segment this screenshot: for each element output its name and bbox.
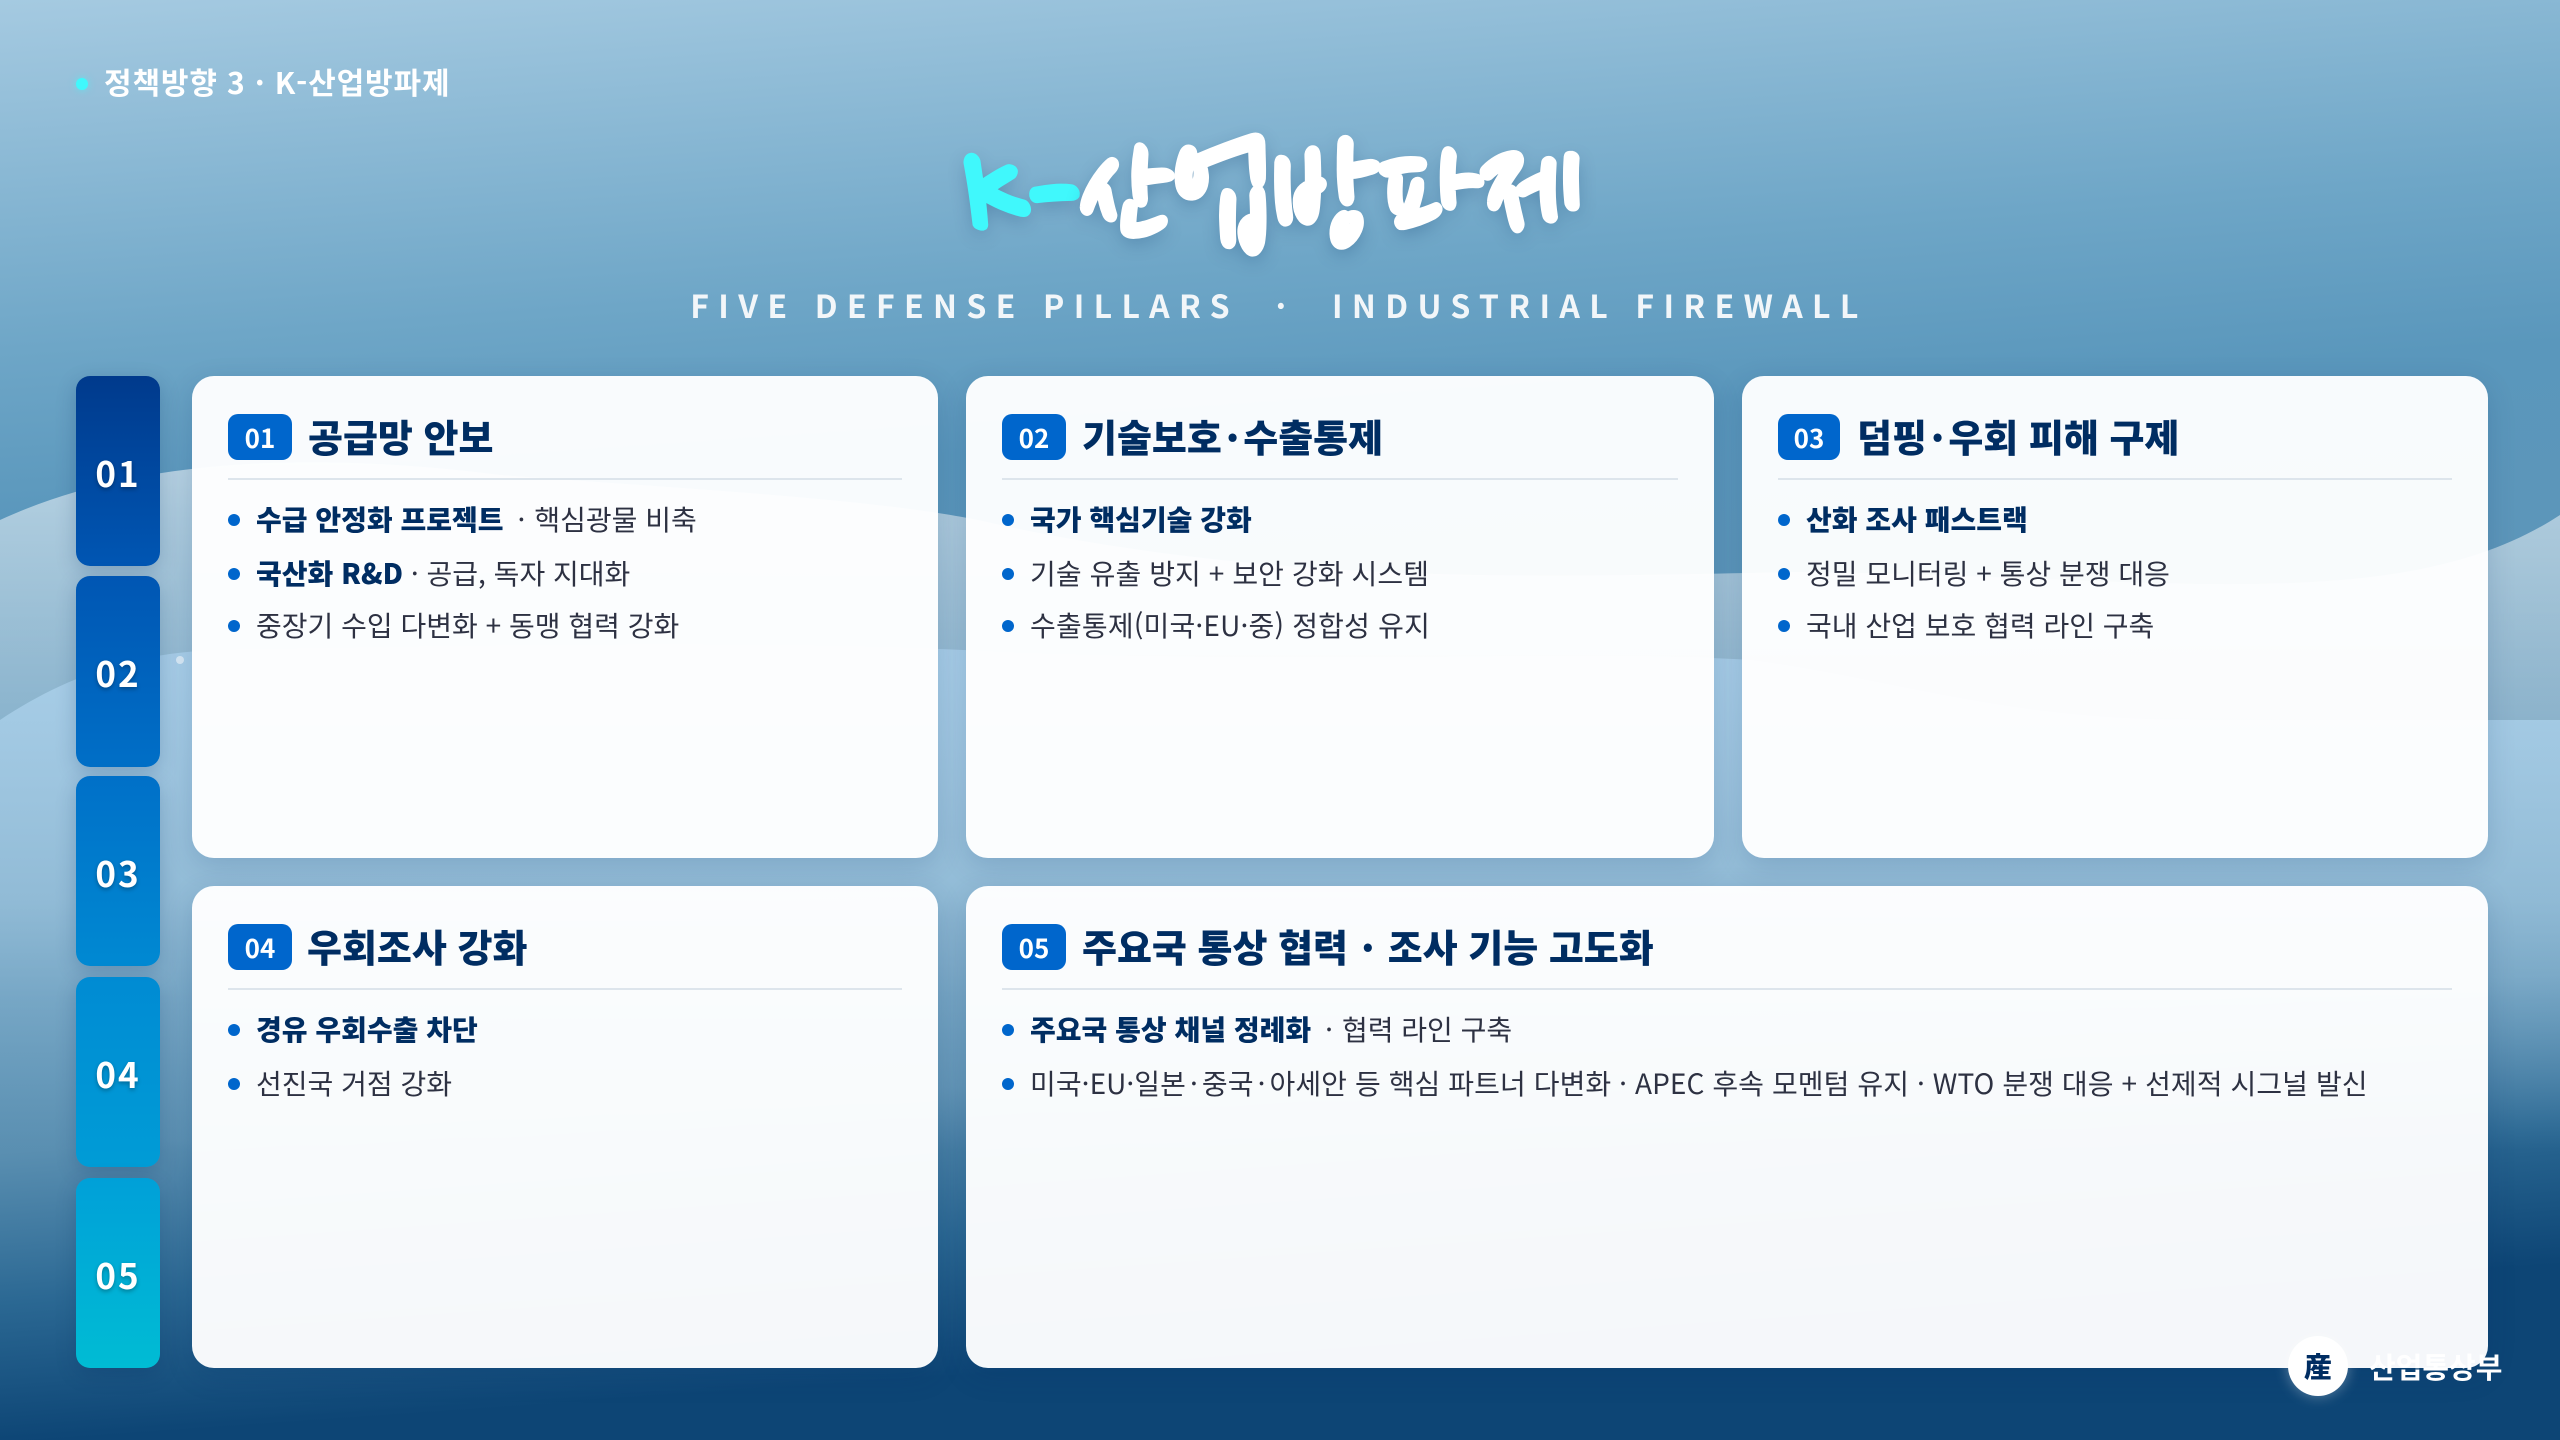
heading 05: 주요국 통상 협력 · 조사 기능 고도화 — [1082, 918, 1654, 972]
panel: 02 technology protection — [966, 376, 1714, 858]
bullet 2: 미국·EU·일본·중국·아세안 등 핵심 파트너 다변화 · APEC 후속 모멘텀 유지 · WTO 분쟁 대응 + 선제적 시그널 발신 — [1030, 1063, 2368, 1103]
logo circle: 産 — [2304, 1346, 2332, 1386]
ministry name: 산업통상부 — [2369, 1345, 2502, 1387]
pillar index: 05 — [76, 1178, 160, 1368]
heading 01: 공급망 안보 — [308, 408, 493, 462]
heading 02: 기술보호·수출통제 — [1082, 408, 1383, 462]
pillar index: 03 — [76, 776, 160, 966]
badge 04: 04 — [245, 929, 275, 966]
bullet 3: 국내 산업 보호 협력 라인 구축 — [1806, 605, 2154, 645]
bullet 2: 선진국 거점 강화 — [256, 1063, 452, 1103]
badge 02: 02 — [1019, 419, 1049, 456]
pillar index: 02: 02 — [95, 647, 141, 698]
title: K-산업방파제 — [963, 123, 1583, 276]
badge 05: 05 — [1019, 929, 1049, 966]
badge 05 — [1002, 924, 1066, 970]
section tag — [73, 59, 450, 103]
badge 03: 03 — [1794, 419, 1824, 456]
pillar index: 05: 05 — [95, 1249, 141, 1300]
panel: 01 supply chain — [192, 376, 938, 858]
ministry logo — [2280, 1336, 2502, 1404]
panel: 05 trade cooperation — [966, 886, 2488, 1368]
tag text: 정책방향 3 · K-산업방파제 — [104, 59, 450, 103]
logo circle — [2288, 1336, 2348, 1396]
pillar index: 02 — [76, 576, 160, 767]
pillar index: 03: 03 — [95, 847, 141, 898]
pillar index: 04 — [76, 977, 160, 1167]
bullet 2: 국산화 R&D · 공급, 독자 지대화 — [256, 553, 630, 593]
bullet 2: 기술 유출 방지 + 보안 강화 시스템 — [1030, 553, 1429, 593]
tag dot — [76, 78, 88, 90]
panel: 04 circumvention investigation — [192, 886, 938, 1368]
panel: 03 dumping relief — [1742, 376, 2488, 858]
subtitle: FIVE DEFENSE PILLARS · INDUSTRIAL FIREWALL — [690, 282, 1868, 328]
badge 03 — [1778, 414, 1840, 460]
pillar index: 04: 04 — [95, 1048, 141, 1099]
bullet 1: 산화 조사 패스트랙 — [1806, 499, 2028, 539]
badge 01 — [228, 414, 292, 460]
heading 04: 우회조사 강화 — [307, 918, 527, 972]
bullet 3: 중장기 수입 다변화 + 동맹 협력 강화 — [256, 605, 679, 645]
bullet 1: 수급 안정화 프로젝트 · 핵심광물 비축 — [256, 499, 697, 539]
badge 04 — [228, 924, 292, 970]
heading 03: 덤핑·우회 피해 구제 — [1857, 408, 2179, 462]
badge 01: 01 — [245, 419, 275, 456]
pillar index: 01 — [76, 376, 160, 566]
bullet 1: 국가 핵심기술 강화 — [1030, 499, 1252, 539]
bullet 1: 경유 우회수출 차단 — [256, 1009, 478, 1049]
bullet 1: 주요국 통상 채널 정례화 · 협력 라인 구축 — [1030, 1009, 1512, 1049]
bullet 3: 수출통제(미국·EU·중) 정합성 유지 — [1030, 605, 1430, 645]
bullet 2: 정밀 모니터링 + 통상 분쟁 대응 — [1806, 553, 2170, 593]
badge 02 — [1002, 414, 1066, 460]
pillar index: 01: 01 — [95, 447, 141, 498]
